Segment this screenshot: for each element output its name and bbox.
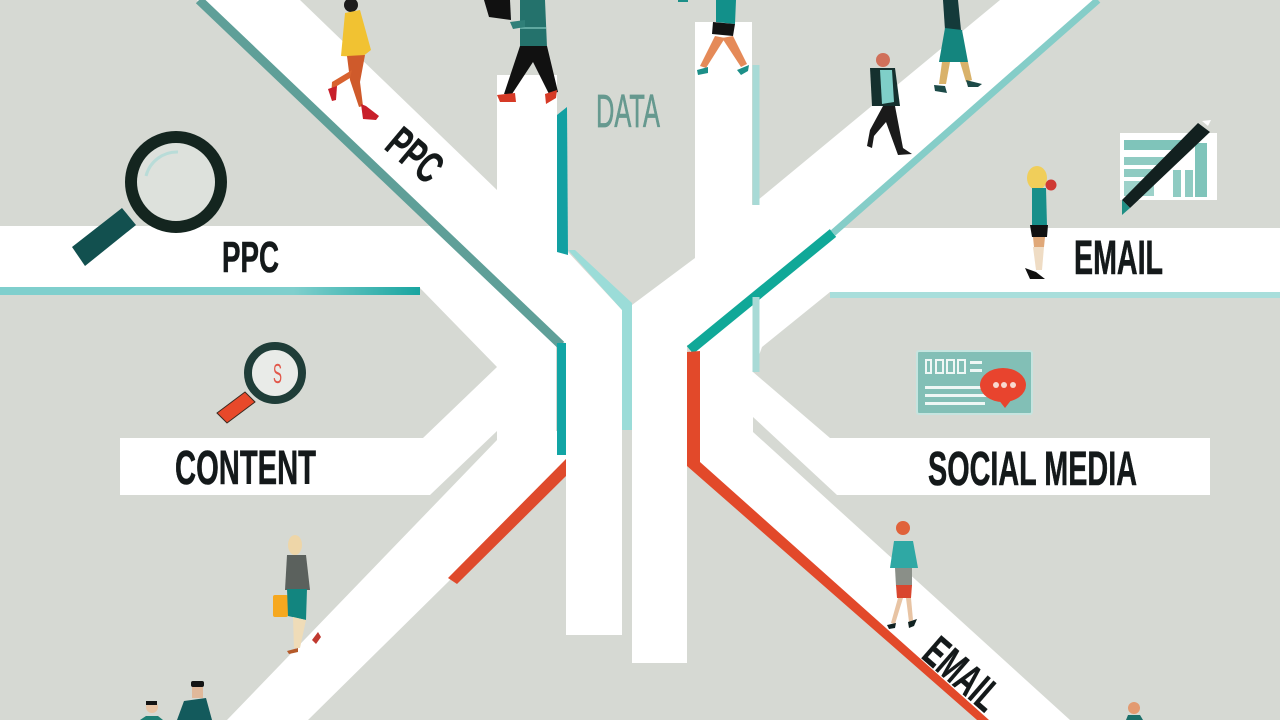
icon: large magnifying glass (72, 137, 221, 266)
icon: small magnifier with S (217, 346, 302, 423)
person: woman with orange bag (273, 535, 321, 654)
icon: social media card with speech bubble (917, 351, 1032, 414)
person: man in teal sweater (887, 521, 918, 629)
icon: chart card with pen (1120, 120, 1217, 215)
heading: EMAIL right: EMAIL (1074, 232, 1163, 285)
person: small figure at bottom (140, 701, 163, 720)
person: man at bottom (177, 681, 212, 720)
heading: PPC diagonal: PPC (377, 118, 452, 193)
person: woman in yellow top (328, 0, 379, 120)
person: blonde woman with flower (1025, 166, 1056, 279)
heading: CONTENT: CONTENT (175, 442, 316, 495)
road network: left side (0, 0, 622, 720)
icon: small magnifier with S: S (273, 358, 282, 389)
person: woman in teal skirt (934, 0, 982, 93)
heading: PPC left: PPC (222, 233, 279, 282)
person: partial teal shoe at top (678, 0, 688, 2)
heading: SOCIAL MEDIA: SOCIAL MEDIA (928, 443, 1137, 496)
person: man in dark jacket (867, 53, 912, 155)
person: woman in teal top on pillar (697, 0, 749, 75)
heading: DATA: DATA (596, 85, 660, 137)
person: partial figure at bottom right (1126, 702, 1143, 720)
person: man with laptop (484, 0, 558, 104)
road network: right side (632, 0, 1280, 720)
